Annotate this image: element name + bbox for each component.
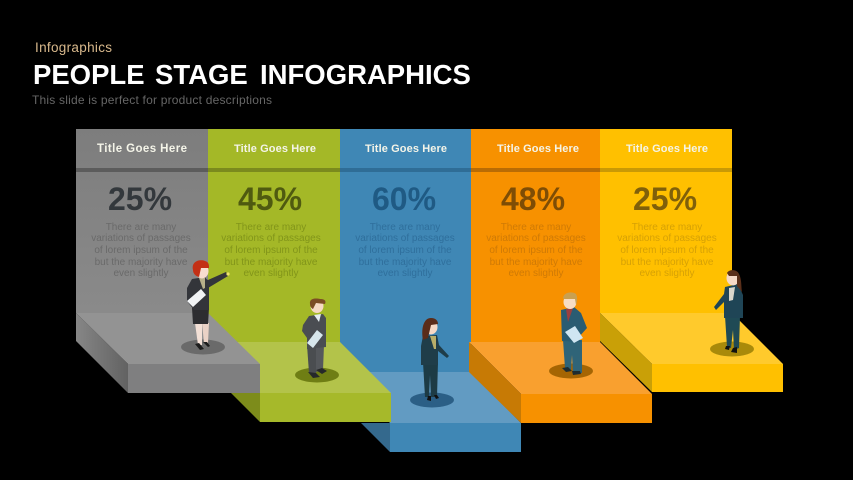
column text: blue <box>355 143 455 279</box>
column text: yellow: There are many <box>632 222 702 233</box>
column text: blue: even slightly <box>377 268 433 279</box>
column text: green: but the majority have <box>225 257 318 268</box>
person: blond man on orange stage <box>549 292 593 378</box>
column text: orange: of lorem ipsum of the <box>489 245 583 256</box>
column text: gray: 25% <box>108 181 172 217</box>
column text: yellow: 25% <box>633 181 697 217</box>
column text: gray: There are many <box>106 222 176 233</box>
title: STAGE <box>155 59 248 90</box>
column text: green: of lorem ipsum of the <box>224 245 318 256</box>
panel: orange stage <box>469 129 652 423</box>
panel: yellow stage <box>600 129 783 392</box>
title: PEOPLE <box>33 59 145 90</box>
column text: green: There are many <box>236 222 306 233</box>
subtitle: This slide is perfect for product descriptions <box>32 93 272 107</box>
column text: gray <box>91 143 191 279</box>
column text: green <box>221 143 321 279</box>
column text: blue: variations of passages <box>355 233 455 244</box>
column text: yellow: of lorem ipsum of the <box>620 245 714 256</box>
column text: blue: of lorem ipsum of the <box>358 245 452 256</box>
column text: green: Title Goes Here <box>234 143 316 155</box>
title: INFOGRAPHICS <box>260 59 471 90</box>
column text: orange: variations of passages <box>486 233 586 244</box>
column text: blue: but the majority have <box>359 257 452 268</box>
person: woman on yellow stage <box>710 270 754 356</box>
column text: green: variations of passages <box>221 233 321 244</box>
column text: yellow: even slightly <box>639 268 695 279</box>
column text: orange: 48% <box>501 181 565 217</box>
column text: blue: 60% <box>372 181 436 217</box>
column text: orange: There are many <box>501 222 571 233</box>
column text: blue: There are many <box>370 222 440 233</box>
person: woman in red hair on gray stage <box>181 260 230 354</box>
column text: yellow <box>617 143 717 279</box>
column text: orange: Title Goes Here <box>497 143 579 155</box>
column text: yellow: variations of passages <box>617 233 717 244</box>
column text: yellow: Title Goes Here <box>626 143 708 155</box>
column text: orange: even slightly <box>508 268 564 279</box>
panel: gray stage <box>76 129 260 393</box>
eyebrow: Infographics: Infographics <box>35 40 112 55</box>
column text: gray: even slightly <box>113 268 169 279</box>
column text: gray: of lorem ipsum of the <box>94 245 188 256</box>
panel: green stage <box>208 129 391 422</box>
column text: yellow: but the majority have <box>621 257 714 268</box>
column text: orange: but the majority have <box>490 257 583 268</box>
column text: blue: Title Goes Here <box>365 143 447 155</box>
column text: gray: but the majority have <box>95 257 188 268</box>
column text: green: even slightly <box>243 268 299 279</box>
panel: blue stage <box>340 129 521 452</box>
column text: gray: variations of passages <box>91 233 191 244</box>
column text: orange <box>486 143 586 279</box>
column text: gray: Title Goes Here <box>97 143 187 155</box>
person: man on green stage <box>295 299 339 382</box>
column text: green: 45% <box>238 181 302 217</box>
person: woman on blue stage <box>410 318 454 408</box>
